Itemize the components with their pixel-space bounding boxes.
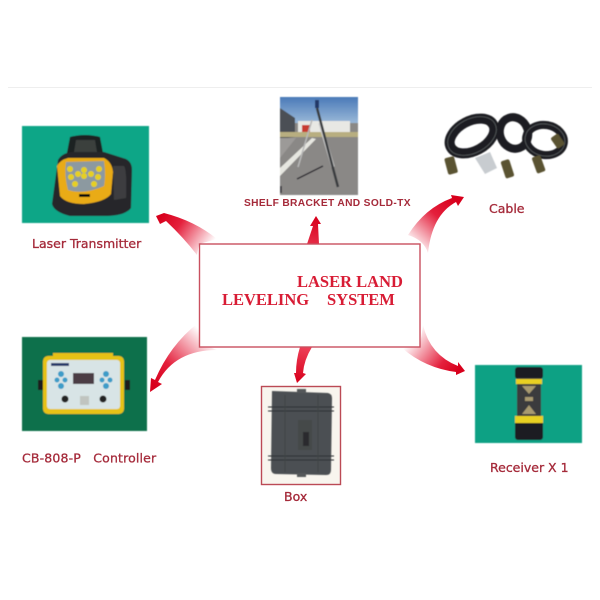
title: LEVELING <box>222 290 309 309</box>
label: receiver: Receiver X 1 <box>490 460 569 475</box>
title: LASER LAND <box>297 272 403 291</box>
label: shelf bracket: SHELF BRACKET AND SOLD-TX <box>244 198 411 209</box>
panel: cable photo <box>441 109 567 179</box>
icon: transmitter body <box>52 135 132 216</box>
arrow: to controller <box>150 323 217 392</box>
icon: controller buttons <box>54 371 112 389</box>
arrow: to laser transmitter <box>156 213 217 255</box>
arrow: to tripod <box>307 216 321 244</box>
label: laser transmitter: Laser Transmitter <box>32 236 142 251</box>
arrow: to box <box>294 347 312 383</box>
panel: central title box <box>200 244 420 347</box>
arrow: to receiver <box>402 325 465 375</box>
icon: carrying case <box>268 389 334 477</box>
arrow: to cable <box>408 195 464 253</box>
label: cable: Cable <box>489 201 525 216</box>
title <box>222 272 403 309</box>
panel: laser transmitter photo <box>22 126 149 223</box>
panel: controller photo <box>22 337 147 431</box>
label: box: Box <box>284 489 307 504</box>
panel: tripod photo <box>280 97 358 195</box>
panel: box photo <box>262 386 340 484</box>
icon: cable connectors <box>444 133 565 179</box>
label: controller: CB-808-P Controller <box>22 450 157 466</box>
title: SYSTEM <box>327 290 395 309</box>
panel: receiver photo <box>475 365 582 443</box>
icon: receiver arrows <box>522 386 536 414</box>
icon: tripod <box>281 100 338 193</box>
